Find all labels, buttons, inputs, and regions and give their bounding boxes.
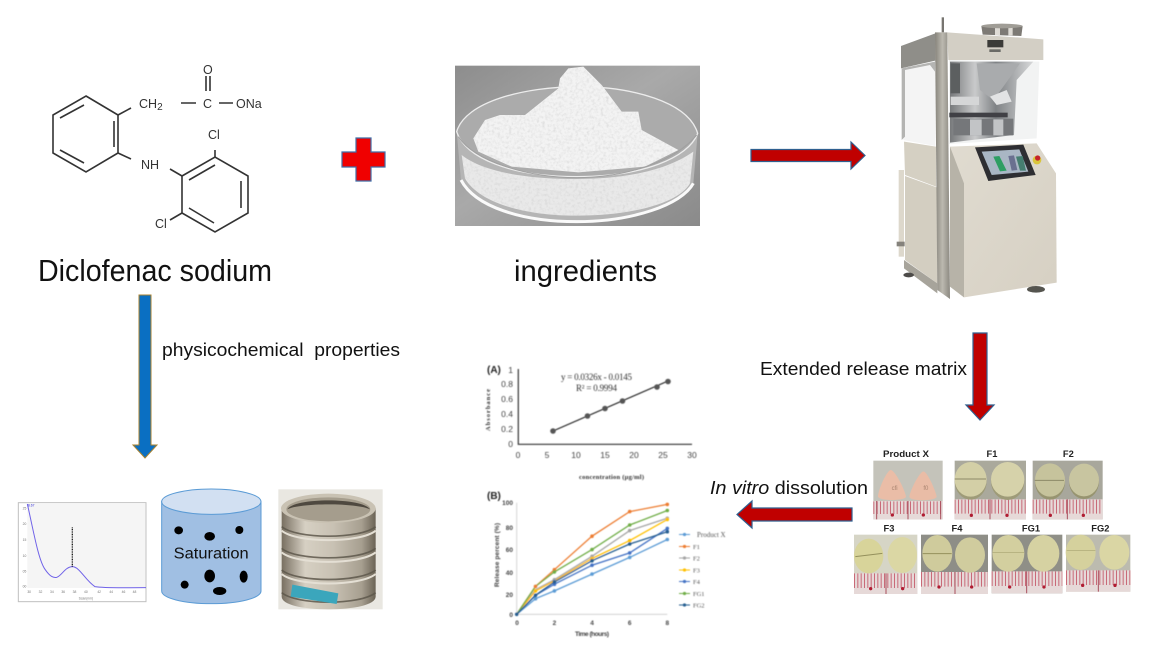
arrow: tablet press to tablets	[966, 333, 994, 420]
molecule: diclofenac sodium: 2	[157, 102, 163, 113]
chart A: calibration curve: 25	[658, 450, 668, 460]
tablet panel: F3	[854, 523, 917, 594]
solute particles	[174, 526, 248, 595]
chart legend: F3	[693, 568, 700, 574]
tablet panel: FG1: FG1	[1022, 523, 1040, 533]
tablet panel: F1: F1	[987, 449, 997, 459]
saturation cylinder	[162, 489, 261, 604]
UV spectrum chart: 44	[109, 590, 113, 594]
UV spectrum chart: 48	[133, 590, 137, 594]
chart legend: F2	[693, 556, 700, 562]
tablet panel: F1	[955, 449, 1026, 519]
chart A: calibration curve: concentration (µg/ml)	[579, 474, 644, 481]
tablet panel: F4: F4	[952, 523, 963, 533]
chart B: release percent over time: 40	[506, 570, 513, 577]
label: Extended release matrix: Extended release matrix	[760, 358, 968, 379]
chart legend: FG2	[693, 602, 705, 610]
UV spectrum chart: 15	[23, 538, 27, 542]
chart A: calibration curve: 0	[508, 439, 513, 449]
molecule: diclofenac sodium: CH	[139, 97, 157, 111]
chart B: release percent over time: 6	[628, 620, 632, 627]
chart A: calibration curve: y = 0.0326x - 0.0145	[561, 372, 632, 382]
UV spectrum chart: 25	[23, 506, 27, 510]
photo: powder ingredients in petri dish	[455, 66, 700, 226]
chart B: release percent over time: 60	[506, 547, 513, 554]
chart legend: F1	[693, 544, 700, 551]
tablet panel: FG1	[992, 523, 1062, 593]
tablet panel: FG2	[1066, 523, 1130, 592]
chart A: calibration curve: 0.6	[501, 394, 513, 404]
central column	[935, 32, 950, 299]
tablet panel: F4	[921, 523, 988, 594]
arrow: physicochemical properties	[133, 295, 157, 458]
chart A: calibration curve: 20	[629, 450, 639, 460]
arrow: tablets to dissolution	[737, 501, 852, 528]
chart B: release percent over time: 100	[502, 500, 513, 507]
UV spectrum chart: 40	[84, 590, 88, 594]
tablet panel: F2: F2	[1063, 449, 1074, 459]
chart B: release percent over time: (B)	[487, 491, 501, 502]
molecule: diclofenac sodium: NH	[141, 158, 159, 172]
chart B: release percent over time	[487, 491, 726, 638]
chart B: release percent over time: 0	[509, 612, 513, 619]
label: In vitro dissolution: In vitro dissolution	[710, 477, 868, 498]
chart A: calibration curve: 5	[545, 450, 550, 460]
tablet panel: Product X: cfi	[892, 486, 898, 492]
chart legend: F4	[693, 579, 701, 586]
chart legend: FG1	[693, 591, 705, 598]
chart legend	[679, 531, 726, 610]
UV spectrum chart: 05	[23, 570, 27, 574]
label: physicochemical properties: physicochemical properties	[162, 339, 400, 360]
molecule: diclofenac sodium: O	[203, 63, 213, 77]
photo: sieve stack	[278, 489, 383, 609]
chart legend: Product X	[697, 531, 726, 539]
chart A: calibration curve: 0	[516, 450, 521, 460]
UV spectrum chart: 38	[73, 590, 77, 594]
chart A: calibration curve: 0.8	[501, 379, 513, 389]
series lines	[517, 504, 667, 614]
chart A: calibration curve: 0.2	[501, 424, 513, 434]
left side of machine	[897, 33, 937, 293]
chart B: release percent over time: 20	[506, 592, 513, 599]
chart A: calibration curve: 0.4	[501, 409, 513, 419]
tablet panel: Product X	[873, 449, 943, 519]
photo: tablet press machine	[897, 17, 1057, 299]
top front panel	[947, 32, 1043, 60]
tablet panel: FG2: FG2	[1091, 523, 1109, 533]
chart A: calibration curve: 15	[600, 450, 610, 460]
UV spectrum chart: 42	[97, 590, 101, 594]
heading: Diclofenac sodium: Diclofenac sodium	[38, 253, 272, 288]
chart A: calibration curve	[485, 365, 697, 481]
touchscreen control panel	[975, 145, 1036, 181]
tablet panel: F2	[1033, 449, 1103, 519]
UV spectrum chart: 46	[122, 590, 126, 594]
antenna and hopper	[942, 17, 1023, 36]
chart A: calibration curve: Absorbance	[485, 389, 492, 431]
icon: red plus	[342, 138, 385, 181]
UV spectrum chart: 10	[23, 554, 27, 558]
molecule: diclofenac sodium	[53, 63, 262, 232]
chart B: release percent over time: 80	[506, 525, 513, 532]
molecule: diclofenac sodium: C	[203, 97, 212, 111]
chart B: release percent over time: Time (hours)	[575, 631, 609, 638]
chart A: calibration curve: (A)	[487, 365, 501, 376]
molecule: diclofenac sodium: ONa	[236, 97, 262, 111]
chart A: calibration curve: 1	[508, 365, 513, 375]
chart A: calibration curve: 10	[571, 450, 581, 460]
lower front cabinet	[950, 143, 1057, 297]
UV spectrum chart: Scan(nm)	[79, 596, 93, 600]
chart B: release percent over time: 0	[515, 620, 519, 627]
UV spectrum chart: 32	[39, 590, 43, 594]
UV spectrum chart: 20	[23, 522, 27, 526]
molecule: diclofenac sodium: Cl	[208, 128, 220, 142]
tablet panel: Product X: f0	[923, 486, 929, 492]
chart B: release percent over time: 2	[553, 620, 557, 627]
front window with turret	[949, 60, 1039, 144]
label: ingredients: ingredients	[514, 255, 657, 288]
tablet panel: Product X: Product X	[883, 449, 930, 459]
chart A: calibration curve: 30	[687, 450, 697, 460]
chart B: release percent over time: 8	[665, 620, 669, 627]
chart A: calibration curve: R² = 0.9994	[576, 383, 618, 393]
label: Saturation: Saturation	[174, 546, 249, 563]
molecule: diclofenac sodium: Cl	[155, 217, 167, 231]
UV spectrum chart: 34	[50, 590, 54, 594]
UV spectrum chart: 30	[27, 590, 31, 594]
UV spectrum chart: B.67	[28, 504, 35, 508]
tablet panel: F3: F3	[884, 523, 894, 533]
series markers	[515, 503, 669, 616]
UV spectrum chart	[18, 503, 146, 602]
arrow: ingredients to tablet press	[751, 142, 865, 169]
UV spectrum chart: 00	[23, 584, 27, 588]
tablet photographs	[854, 449, 1130, 594]
chart B: release percent over time: Release percent (%)	[494, 523, 501, 587]
chart B: release percent over time: 4	[590, 620, 594, 627]
emergency stop button	[1033, 155, 1041, 164]
UV spectrum chart: 36	[61, 590, 65, 594]
